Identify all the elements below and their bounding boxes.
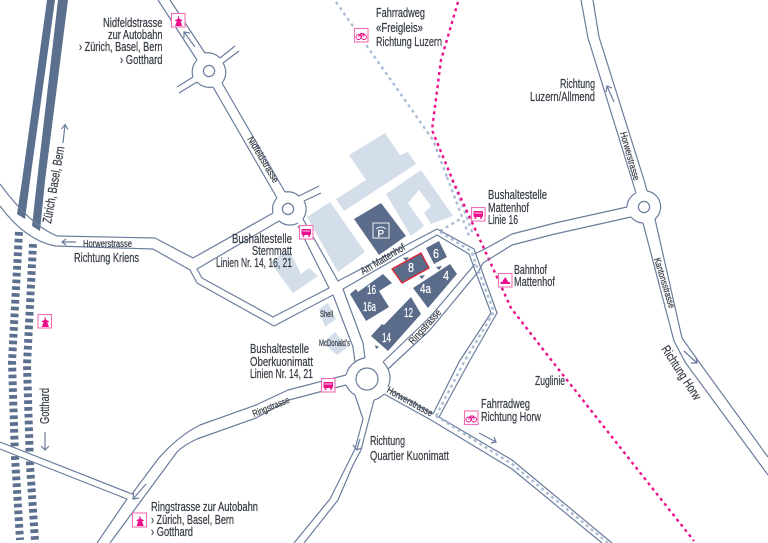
label: Bahnhof Mattenhof bbox=[514, 262, 555, 289]
cycle path Freigleis bbox=[336, 2, 472, 236]
arrow: Zürich Basel Bern bbox=[62, 124, 68, 143]
label: Fahrradweg Richtung Horw: Richtung Horw bbox=[481, 409, 542, 424]
arrow: Horwerstrasse west bbox=[62, 239, 76, 245]
railway tracks bbox=[12, 232, 35, 541]
arrow: Nidfeldstrasse bbox=[184, 32, 195, 47]
dark buildings bbox=[350, 203, 457, 351]
icon: motorway Nidfeldstrasse bbox=[172, 14, 185, 27]
label: Richtung Luzern/Allmend: Richtung bbox=[560, 76, 595, 91]
motorway bbox=[17, 0, 68, 231]
building 8 bbox=[392, 253, 429, 283]
icon: train Bahnhof Mattenhof bbox=[498, 274, 512, 287]
label: Bushaltestelle Sternmatt: Bushaltestelle bbox=[232, 231, 292, 246]
label: Bushaltestelle Sternmatt: Linien Nr. 14, 16, 21 bbox=[216, 255, 292, 270]
building numbers: 12 bbox=[404, 305, 413, 320]
label: Gotthard: Gotthard bbox=[37, 388, 52, 424]
white road fill across railway bbox=[0, 442, 132, 499]
building numbers: 4a bbox=[420, 281, 432, 296]
label: Richtung Quartier Kuonimatt: Richtung bbox=[370, 433, 405, 448]
label: Fahrradweg Freigleis: Fahrradweg bbox=[376, 5, 425, 20]
building numbers: 6 bbox=[433, 246, 439, 261]
label: Richtung Kriens: Richtung Kriens bbox=[74, 250, 139, 265]
label: Richtung Quartier Kuonimatt: Quartier Kuonimatt bbox=[370, 448, 449, 463]
label: Ringstrasse zur Autobahn: Ringstrasse zur Autobahn bbox=[151, 499, 258, 514]
arrow: Gotthard bbox=[41, 432, 49, 450]
railway line bbox=[432, 2, 694, 541]
arrows bbox=[41, 32, 697, 499]
road label: Horwerstrasse southeast: Horwerstrasse bbox=[385, 385, 435, 420]
label: Bushaltestelle Oberkuonimatt bbox=[250, 341, 313, 381]
road label: Ringstrasse west: Ringstrasse bbox=[251, 395, 291, 420]
parking sign: P bbox=[378, 229, 384, 240]
label: Ringstrasse zur Autobahn bbox=[151, 499, 258, 539]
icon: bus Mattenhof bbox=[472, 208, 485, 221]
Ringstrasse bbox=[383, 264, 475, 362]
building numbers: 8 bbox=[408, 260, 414, 275]
Ringstrasse west bbox=[0, 375, 346, 494]
road label: Horwerstrasse west: Horwerstrasse bbox=[83, 239, 132, 250]
building numbers: 14 bbox=[382, 330, 391, 345]
label: Nidfeldstrasse zur Autobahn: zur Autobahn bbox=[108, 27, 162, 42]
Horwerstrasse west bbox=[0, 184, 273, 258]
label: Richtung Luzern/Allmend bbox=[530, 76, 595, 104]
label: Bushaltestelle Oberkuonimatt: Bushaltestelle bbox=[250, 341, 309, 356]
label: Fahrradweg Freigleis bbox=[376, 5, 442, 49]
label: Shell: Shell bbox=[320, 309, 333, 319]
road label: Horwerstrasse north: Horwerstrasse bbox=[617, 131, 641, 182]
Horwerstrasse southeast bbox=[384, 389, 602, 543]
arrow: Fahrradweg Horw bbox=[479, 433, 496, 443]
label: Bahnhof Mattenhof: Mattenhof bbox=[514, 274, 555, 289]
label: Zuglinie: Zuglinie bbox=[535, 373, 565, 388]
label: Fahrradweg Richtung Horw bbox=[481, 396, 542, 424]
label: Richtung Quartier Kuonimatt bbox=[370, 433, 449, 463]
label: Fahrradweg Freigleis: Richtung Luzern bbox=[376, 34, 442, 49]
icon: motorway Gotthard bbox=[38, 314, 52, 328]
road label: Nidfeldstrasse: Nidfeldstrasse bbox=[244, 135, 281, 185]
label: Nidfeldstrasse zur Autobahn: › Zürich, Basel, Bern bbox=[79, 39, 162, 54]
icon: bicycle Horw bbox=[464, 411, 478, 424]
icon: bus Sternmatt bbox=[300, 226, 313, 239]
label: Richtung Horw: Richtung Horw bbox=[658, 342, 705, 403]
label: Bahnhof Mattenhof: Bahnhof bbox=[514, 262, 547, 277]
Richtung Kuonimatt bbox=[304, 400, 374, 543]
label: McDonald's: McDonald's bbox=[319, 338, 350, 348]
roundabout Sternmatt bbox=[273, 192, 306, 225]
label: Bushaltestelle Mattenhof bbox=[488, 187, 547, 227]
icon: motorway Ringstrasse bbox=[132, 513, 146, 527]
arrow: Quartier Kuonimatt bbox=[353, 439, 361, 450]
Horw road bbox=[581, 0, 636, 193]
building numbers: 16 bbox=[367, 282, 376, 297]
road label: Am Mattenhof: Am Mattenhof bbox=[358, 242, 407, 278]
label: Bushaltestelle Mattenhof: Linie 16 bbox=[488, 212, 518, 227]
Nidfeldstrasse bbox=[158, 0, 197, 60]
label: Bushaltestelle Mattenhof: Mattenhof bbox=[488, 200, 529, 215]
icon: bicycle Freigleis bbox=[354, 28, 368, 42]
road label: Ringstrasse east: Ringstrasse bbox=[407, 307, 444, 347]
label: Bushaltestelle Oberkuonimatt: Oberkuonimatt bbox=[250, 354, 313, 369]
arrow: Luzern Allmend bbox=[606, 86, 614, 102]
roundabout Oberkuonimatt bbox=[346, 358, 390, 400]
light buildings bbox=[270, 133, 453, 355]
label: Ringstrasse zur Autobahn: › Zürich, Basel, Bern bbox=[151, 512, 234, 527]
label: Nidfeldstrasse zur Autobahn bbox=[79, 15, 162, 67]
roundabout Nidfeld bbox=[192, 53, 226, 87]
building numbers bbox=[363, 246, 449, 345]
label: Zürich, Basel, Bern: Zürich, Basel, Bern bbox=[39, 145, 67, 225]
label: Ringstrasse zur Autobahn: › Gotthard bbox=[151, 524, 193, 539]
building numbers: 16a bbox=[363, 299, 376, 314]
roundabout Kantonsstrasse bbox=[627, 191, 661, 223]
building numbers: 4 bbox=[443, 268, 449, 283]
icon: bus Oberkuonimatt bbox=[322, 378, 335, 392]
label: Bushaltestelle Mattenhof: Bushaltestelle bbox=[488, 187, 547, 202]
arrow: Ringstrasse bbox=[133, 484, 146, 499]
label: Bushaltestelle Sternmatt bbox=[216, 231, 292, 270]
entrance markers bbox=[375, 257, 442, 349]
label: Bushaltestelle Sternmatt: Sternmatt bbox=[252, 243, 292, 258]
parking sign bbox=[373, 223, 389, 240]
label: Nidfeldstrasse zur Autobahn: › Gotthard bbox=[120, 52, 162, 67]
road label: Kantonsstrasse: Kantonsstrasse bbox=[651, 257, 677, 310]
label: Bushaltestelle Oberkuonimatt: Linien Nr. 14, 21 bbox=[250, 366, 313, 381]
label: Fahrradweg Freigleis: «Freigleis» bbox=[376, 20, 423, 35]
label: Nidfeldstrasse zur Autobahn: Nidfeldstrasse bbox=[103, 15, 162, 30]
arrow: Richtung Horw bbox=[684, 351, 697, 363]
label: Richtung Luzern/Allmend: Luzern/Allmend bbox=[530, 89, 595, 104]
label: Fahrradweg Richtung Horw: Fahrradweg bbox=[481, 396, 530, 411]
